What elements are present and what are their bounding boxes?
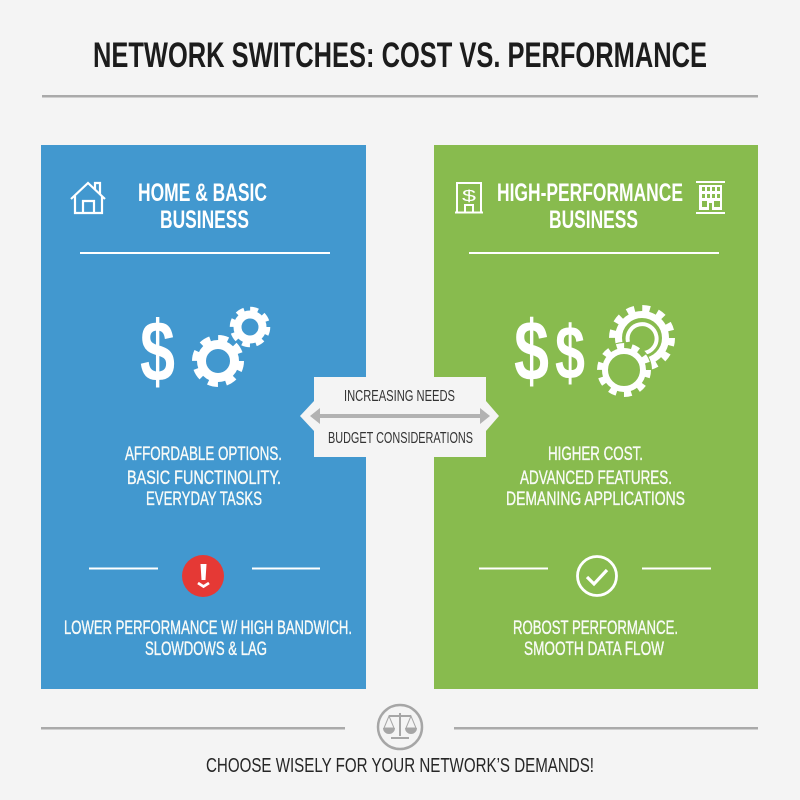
text: drawback: [64, 618, 352, 660]
icon: bank: $: [462, 188, 476, 205]
icon: office building: [696, 181, 725, 214]
text: features: DEMANING APPLICATIONS: [506, 489, 685, 510]
text: benefit: SMOOTH DATA FLOW: [524, 639, 664, 660]
icon: check circle: [578, 556, 616, 596]
icon: gears: [195, 309, 268, 384]
text: features: [506, 444, 685, 510]
icon: dollar sign: $: [140, 304, 175, 400]
icon: double dollar: [514, 304, 585, 399]
panel heading: HIGH-PERFORMANCE: [497, 179, 683, 207]
icon: double dollar: $: [514, 304, 549, 399]
panel: high performance business: [434, 145, 758, 689]
text: benefit: [513, 618, 678, 660]
icon: bank: [455, 183, 483, 212]
text: drawback: SLOWDOWS & LAG: [145, 639, 267, 660]
panel heading: HOME & BASIC: [138, 179, 267, 207]
panel: home and basic business: [41, 145, 366, 689]
text: drawback: LOWER PERFORMANCE W/ HIGH BANDWICH.: [64, 618, 352, 639]
icon: double dollar: $: [555, 311, 585, 396]
callout: trade-off box: [300, 377, 499, 457]
panel heading: BUSINESS: [549, 206, 638, 234]
panel heading: [497, 179, 683, 234]
icon: large gears: [596, 308, 672, 398]
closing message: CHOOSE WISELY FOR YOUR NETWORK’S DEMANDS!: [206, 755, 594, 777]
panel heading: [138, 179, 267, 234]
text: features: [125, 444, 282, 510]
text: features: HIGHER COST.: [548, 444, 643, 465]
text: budget considerations: BUDGET CONSIDERATIONS: [328, 430, 473, 447]
text: features: EVERYDAY TASKS: [146, 489, 262, 510]
panel heading: BUSINESS: [160, 206, 249, 234]
text: features: AFFORDABLE OPTIONS.: [125, 444, 282, 465]
arrow: double headed: [310, 408, 490, 424]
text: features: ADVANCED FEATURES.: [520, 468, 672, 489]
text: benefit: ROBOST PERFORMANCE.: [513, 618, 678, 639]
text: increasing needs: INCREASING NEEDS: [344, 388, 455, 405]
icon: balance scale: [378, 705, 422, 749]
icon: warning: [182, 555, 224, 597]
text: features: BASIC FUNCTINOLITY.: [127, 468, 281, 489]
icon: house: [71, 183, 105, 213]
